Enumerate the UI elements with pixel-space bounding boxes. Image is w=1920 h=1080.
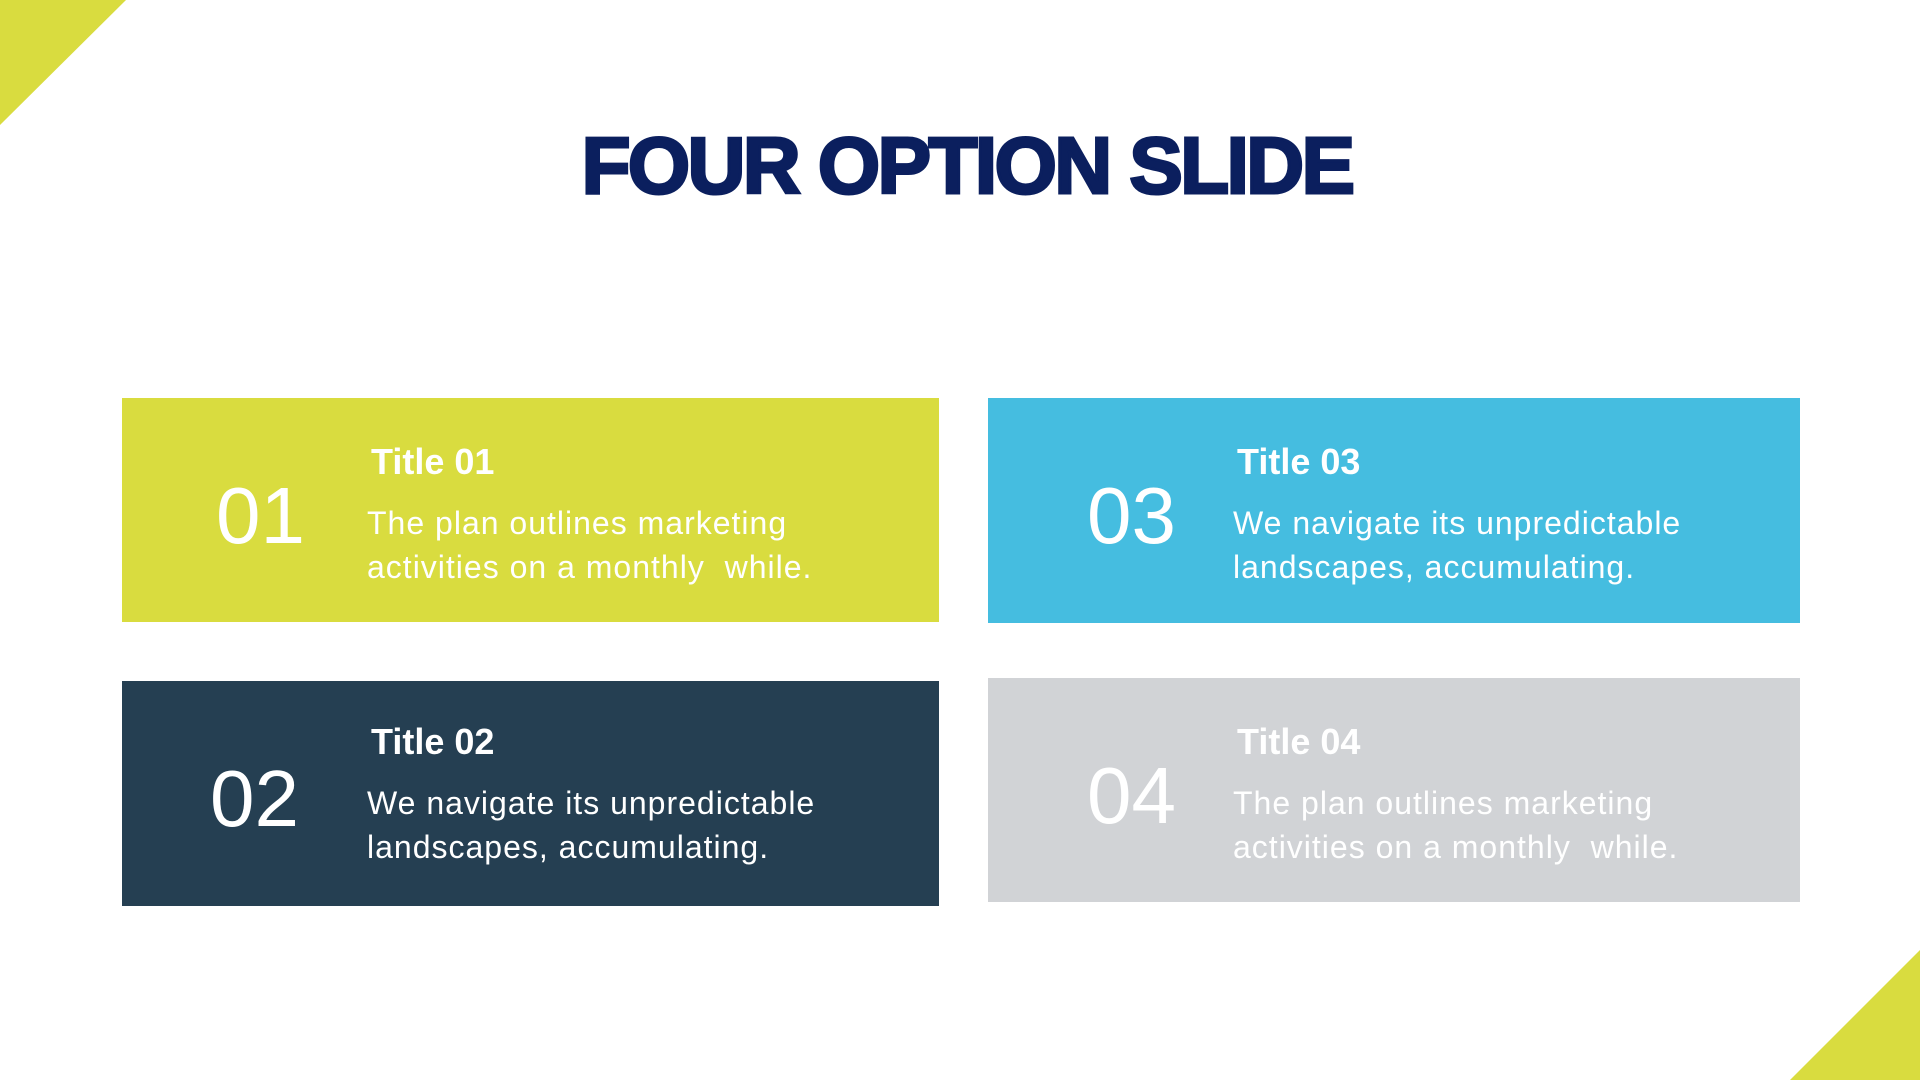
body 04 [1233, 785, 1678, 865]
panel: option 02 [122, 681, 939, 906]
body 01 [367, 505, 812, 585]
number 03: 03 [1087, 471, 1176, 560]
body 04: activities on a monthly while. [1233, 829, 1678, 865]
title 02: Title 02 [371, 721, 494, 762]
body 03: We navigate its unpredictable [1233, 505, 1681, 541]
corner triangle top-left [0, 0, 126, 125]
title 01: Title 01 [371, 441, 494, 482]
panel: option 01 [122, 398, 939, 622]
title 03: Title 03 [1237, 441, 1360, 482]
body 03: landscapes, accumulating. [1233, 549, 1635, 585]
body 01: activities on a monthly while. [367, 549, 812, 585]
body 02: We navigate its unpredictable [367, 785, 815, 821]
panel: option 03 [988, 398, 1800, 623]
number 01: 01 [216, 471, 305, 560]
body 04: The plan outlines marketing [1233, 785, 1653, 821]
number 04: 04 [1087, 751, 1176, 840]
body 03 [1233, 505, 1681, 585]
body 01: The plan outlines marketing [367, 505, 787, 541]
corner triangle bottom-right [1790, 950, 1920, 1080]
title 04: Title 04 [1237, 721, 1360, 762]
panel: option 04 [988, 678, 1800, 902]
body 02: landscapes, accumulating. [367, 829, 769, 865]
number 02: 02 [210, 754, 299, 843]
title: FOUR OPTION SLIDE [582, 121, 1352, 210]
body 02 [367, 785, 815, 865]
